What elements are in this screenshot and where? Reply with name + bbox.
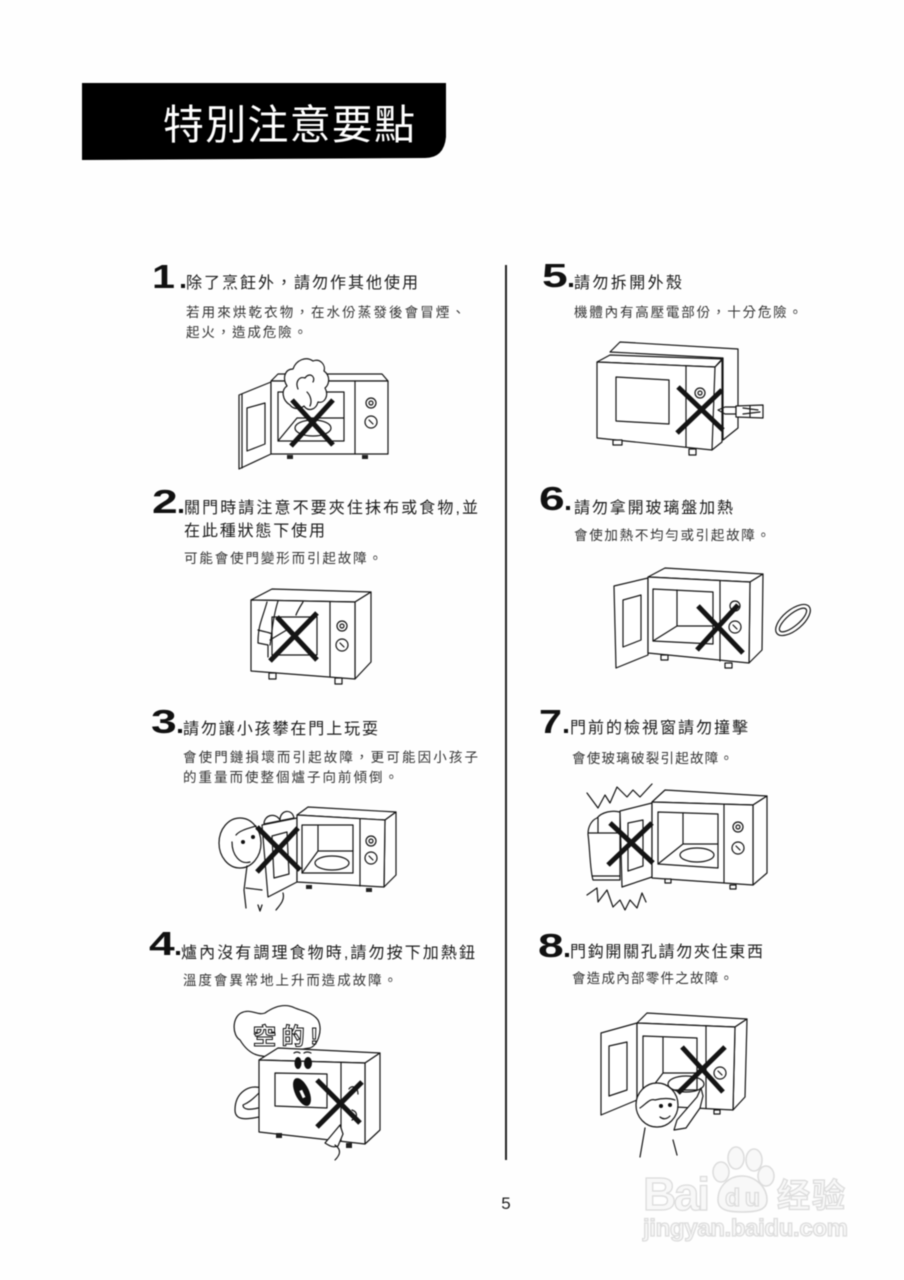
body text 1 (186, 304, 465, 340)
heading 4: 爐內沒有調理食物時,請勿按下加熱鈕 (181, 944, 475, 962)
speech bubble: 空的! (253, 1023, 318, 1049)
watermark: Baidu jingyan: du (725, 1184, 760, 1212)
page number: 5 (501, 1194, 511, 1213)
illustration: child touching door hook hole (601, 1013, 747, 1157)
column divider (505, 265, 507, 1160)
panel: item 6 (539, 480, 816, 668)
body text 4: 溫度會異常地上升而造成故障。 (183, 973, 397, 988)
illustration: cloth caught in door (251, 589, 371, 684)
illustration: microwave with smoke (239, 359, 388, 469)
heading 3: 請勿讓小孩攀在門上玩耍 (183, 719, 378, 738)
panel: item 7 (539, 703, 767, 910)
heading 2: 關門時請注意不要夾住抹布或食物,並 (184, 498, 478, 517)
heading 7: 門前的檢視窗請勿撞擊 (570, 719, 748, 737)
body text 1: 若用來烘乾衣物，在水份蒸發後會冒煙、 (186, 304, 465, 320)
icon: cross (257, 827, 300, 872)
heading 2: 在此種狀態下使用 (184, 522, 325, 540)
icon: glass plate (770, 599, 816, 641)
body text 6: 會使加熱不均勻或引起故障。 (574, 527, 770, 543)
watermark: Baidu jingyan: jingyan.baidu.com (642, 1215, 848, 1242)
body text 3: 的重量而使整個爐子向前傾倒。 (183, 769, 398, 785)
watermark: Baidu jingyan (642, 1147, 848, 1242)
number 5: 5 (542, 257, 568, 294)
icon: cross (697, 605, 743, 653)
watermark: Baidu jingyan: 经验 (777, 1177, 845, 1214)
number 6: 6 (539, 480, 565, 517)
icon: cross (270, 613, 317, 661)
panel: item 2 (152, 483, 478, 684)
number 7: 7 (539, 703, 562, 740)
title banner: 特別注意要點 (163, 102, 415, 148)
body text 3 (183, 749, 478, 785)
heading 8: 門鈎開關孔請勿夾住東西 (570, 943, 763, 961)
body text 5: 機體內有高壓電部份，十分危險。 (574, 304, 802, 320)
icon: cross (317, 1080, 362, 1127)
number 2: 2 (152, 483, 178, 520)
panel: item 8 (538, 927, 763, 1157)
heading 1: 除了烹飪外，請勿作其他使用 (186, 273, 418, 292)
illustration: empty microwave character (234, 1006, 380, 1160)
panel: item 3 (151, 703, 478, 911)
panel: item 5 (542, 257, 802, 455)
illustration: microwave and glass plate (614, 568, 816, 668)
icon: cross (678, 1047, 725, 1093)
number 4: 4 (149, 925, 175, 962)
number 1: 1 (152, 258, 175, 295)
illustration: child hanging on door (219, 807, 396, 911)
heading 2 (179, 498, 478, 540)
title banner (82, 83, 446, 160)
icon: cross (677, 387, 723, 433)
number 3: 3 (151, 703, 177, 740)
body text 2: 可能會使門變形而引起故障。 (184, 550, 382, 566)
heading 5: 請勿拆開外殼 (574, 274, 682, 292)
watermark: Baidu jingyan: Bai (643, 1168, 710, 1220)
illustration: kettle hitting door window (587, 784, 767, 910)
body text 3: 會使門鏈損壞而引起故障，更可能因小孩子 (183, 749, 478, 765)
number 8: 8 (538, 927, 564, 964)
panel: item 4 (149, 925, 475, 1160)
watermark paw (713, 1147, 774, 1212)
body text 8: 會造成內部零件之故障。 (572, 971, 733, 986)
panel: item 1 (152, 258, 465, 469)
child figure (636, 1083, 703, 1157)
speech bubble (234, 1006, 320, 1057)
body text 7: 會使玻璃破裂引起故障。 (572, 750, 733, 766)
body text 1: 起火，造成危險。 (186, 325, 307, 340)
illustration: microwave with screwdriver (597, 342, 763, 455)
heading 6: 請勿拿開玻璃盤加熱 (574, 498, 733, 517)
icon: cross (291, 400, 333, 446)
icon: cross (608, 823, 653, 865)
